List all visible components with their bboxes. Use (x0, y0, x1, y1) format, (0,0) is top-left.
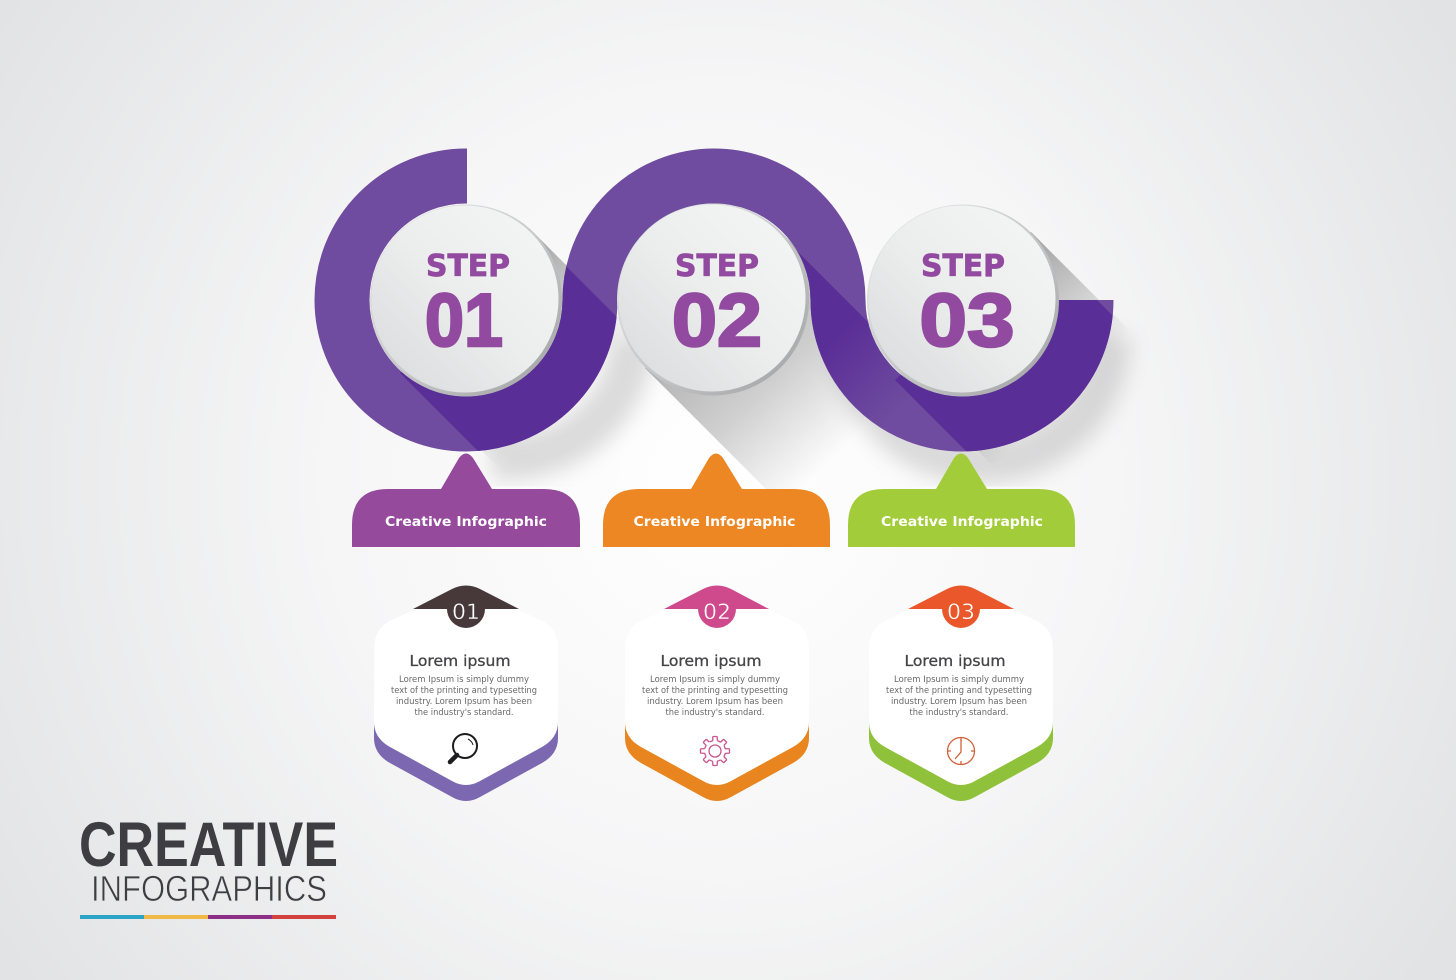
card 1 body text: the industry's standard. (414, 708, 514, 718)
step 2 label: STEP (675, 249, 759, 284)
card 2 (625, 585, 809, 801)
card 2 header: 02 (703, 600, 731, 624)
card 1 title: Lorem ipsum (410, 652, 510, 670)
logo (79, 810, 338, 919)
card 2 body text: text of the printing and typesetting (642, 686, 788, 696)
card 3 header: 03 (947, 600, 975, 624)
step 1 number: 01 (425, 278, 503, 362)
purple ribbon (342, 176, 1086, 424)
icon: gear (700, 736, 730, 766)
card 3 (869, 585, 1053, 801)
card 3 body text: the industry's standard. (910, 708, 1008, 718)
card 2 body text (642, 675, 788, 718)
card 2 body text: Lorem Ipsum is simply dummy (650, 675, 780, 685)
card 2 body text: industry. Lorem Ipsum has been (647, 697, 783, 707)
step 2 number: 02 (672, 278, 762, 362)
logo word: infographics: INFOGRAPHICS (91, 868, 327, 909)
card 1 body text: text of the printing and typesetting (391, 686, 537, 696)
card 2 header (664, 586, 769, 628)
logo word: creative: CREATIVE (79, 810, 338, 880)
step 3 label: STEP (921, 249, 1005, 284)
card 3 body text: industry. Lorem Ipsum has been (891, 697, 1027, 707)
card 1 body text: Lorem Ipsum is simply dummy (399, 675, 529, 685)
step 3 number: 03 (920, 278, 1014, 362)
step 2 disc (617, 204, 809, 396)
card 1 header (413, 586, 519, 628)
card 2 body text: the industry's standard. (666, 708, 764, 718)
card 3 body text: text of the printing and typesetting (886, 686, 1032, 696)
card 3 title: Lorem ipsum (904, 652, 1006, 670)
card 1 body text (391, 675, 537, 718)
step 3 disc (867, 204, 1059, 396)
card 1 (374, 585, 558, 801)
card 2 title: Lorem ipsum (660, 652, 762, 670)
step 1 label: STEP (426, 249, 510, 284)
long shadows on background (398, 232, 1171, 528)
card 3 header (908, 586, 1014, 628)
card 1 body text: industry. Lorem Ipsum has been (396, 697, 532, 707)
card 3 body text (886, 675, 1032, 718)
callout tab: purple (352, 454, 580, 547)
logo colour bar (80, 915, 336, 919)
icon: magnifier (450, 734, 477, 762)
callout tab: green: Creative Infographic (881, 514, 1043, 530)
card 1 header: 01 (452, 600, 480, 624)
icon: clock (948, 738, 974, 764)
callout tab: orange: Creative Infographic (634, 514, 796, 530)
callout tab: green (848, 454, 1075, 547)
callout tab: orange (603, 454, 830, 547)
step 1 disc (370, 204, 562, 396)
callout tab: purple: Creative Infographic (385, 514, 547, 530)
card 3 body text: Lorem Ipsum is simply dummy (894, 675, 1024, 685)
